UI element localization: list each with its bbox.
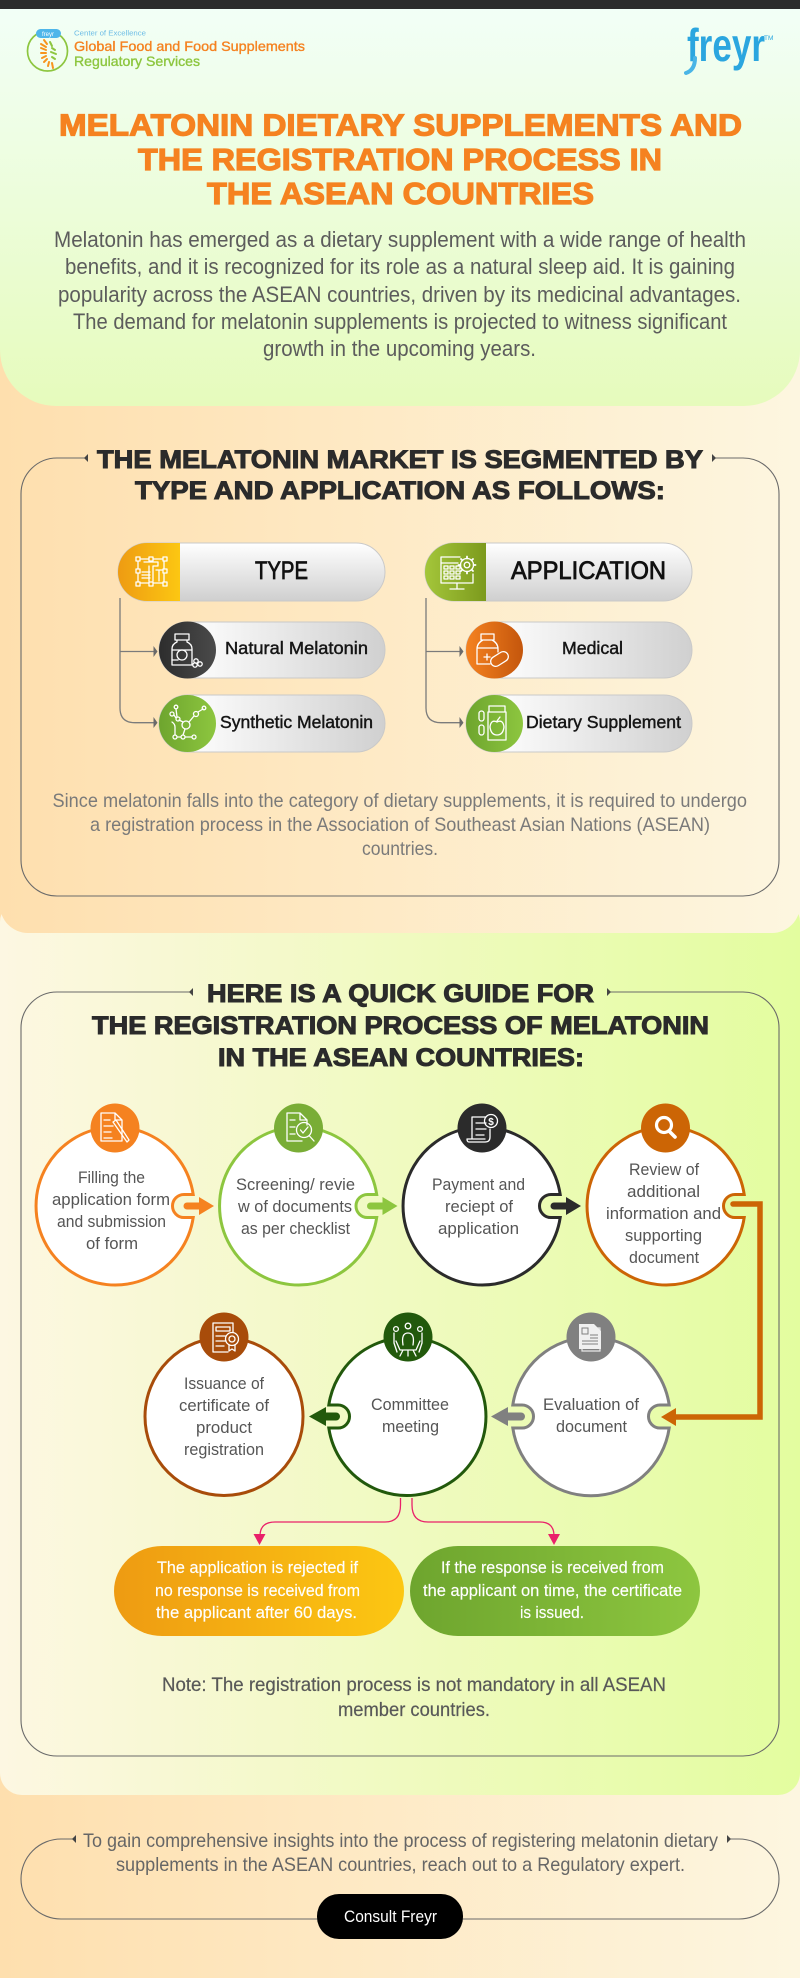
text: introduction: benefits, and it is recognized for its role as a natural sleep aid. It is gaining: [65, 254, 735, 279]
logo: centre of excellence: Center of Excellence: [74, 28, 146, 38]
text: step 4: Review of: [629, 1161, 699, 1179]
outcome: application rejected: The application is rejected if: [157, 1558, 358, 1577]
outcome: certificate issued: is issued.: [520, 1603, 584, 1622]
text: step 1: application form: [52, 1191, 170, 1209]
pill: medical: Medical: [562, 638, 623, 658]
note: Note: The registration process is not mandatory in all ASEAN: [162, 1674, 666, 1696]
heading: quick guide: IN THE ASEAN COUNTRIES:: [218, 1044, 584, 1072]
pill: natural melatonin: Natural Melatonin: [225, 638, 368, 658]
step 1: filling the application form: [36, 1104, 214, 1285]
step 5: issuance of certificate: [145, 1312, 303, 1496]
icon: people at table: [384, 1312, 432, 1362]
step 3: payment: [403, 1104, 581, 1285]
text: step 7: Evaluation of: [543, 1396, 639, 1414]
logo: centre of excellence: Global Food and Food Supplements: [74, 38, 305, 54]
icon: documents: [566, 1312, 616, 1362]
text: step 3: reciept of: [445, 1198, 513, 1216]
arrow: committee to issuance: [309, 1407, 340, 1426]
arrow: step 1 to 2: [184, 1197, 214, 1215]
step 7: evaluation of document: [491, 1312, 669, 1496]
text: step 3: application: [438, 1220, 519, 1238]
pill: application: [425, 543, 692, 601]
text: introduction: popularity across the ASEAN countries, driven by its medicinal advantages.: [58, 282, 741, 307]
connector: application tree: [426, 598, 464, 728]
outcome: certificate issued: If the response is received from: [441, 1558, 664, 1577]
text: introduction: Melatonin has emerged as a dietary supplement with a wide range of health: [54, 227, 746, 252]
outcome: application rejected: no response is received from: [155, 1581, 360, 1600]
logo: freyr: TM: [764, 35, 773, 42]
outline frame: market segmentation: [21, 458, 779, 896]
button: consult freyr: [317, 1894, 463, 1939]
pill: type: [118, 543, 385, 601]
text: introduction: growth in the upcoming years.: [263, 336, 536, 361]
heading: quick guide: HERE IS A QUICK GUIDE FOR: [207, 980, 594, 1008]
arrow: step 7 to committee: [491, 1407, 525, 1426]
text: step 6: meeting: [382, 1418, 439, 1436]
text: step 2: [236, 1176, 355, 1238]
icon: certificate: [200, 1312, 248, 1362]
text: step 1: of form: [86, 1235, 138, 1253]
text: step 4: additional: [627, 1183, 700, 1201]
logo: centre of excellence: Regulatory Services: [74, 53, 200, 69]
icon: receipt and dollar: $: [488, 1117, 494, 1128]
text: registration requirement: Since melatonin falls into the category of dietary supplements, it is required to undergo: [52, 790, 747, 812]
text: registration requirement: a registration process in the Association of Southeast Asian Nations (ASEAN): [90, 814, 710, 836]
text: step 5: registration: [184, 1441, 264, 1459]
icon: form and pencil: [90, 1104, 140, 1152]
pill: dietary supplement: [466, 695, 692, 752]
text: step 6: [371, 1396, 449, 1436]
panel: call to action: [21, 1830, 779, 1939]
step 6: committee meeting: [309, 1312, 486, 1496]
icon: monitor with gear: [441, 556, 476, 589]
title: [59, 108, 742, 211]
title: MELATONIN DIETARY SUPPLEMENTS AND: [59, 108, 742, 142]
pill: type: TYPE: [255, 557, 308, 585]
icon: molecule: [170, 705, 206, 739]
title: THE ASEAN COUNTRIES: [207, 176, 594, 211]
text: introduction: The demand for melatonin supplements is projected to witness significant: [73, 309, 727, 334]
button: consult freyr: Consult Freyr: [344, 1907, 437, 1926]
step 4: review of additional information: [587, 1104, 744, 1285]
outcome: certificate issued: [410, 1546, 700, 1636]
note: member countries.: [338, 1699, 490, 1721]
note: [162, 1674, 666, 1721]
title: THE REGISTRATION PROCESS IN: [138, 142, 662, 177]
pill: medical: [466, 622, 692, 678]
heading: quick guide: [92, 980, 709, 1072]
arrow: committee to certificate outcome: [412, 1498, 560, 1545]
frame end markers: [189, 988, 611, 996]
text: step 3: Payment and: [432, 1176, 525, 1194]
text: step 7: document: [556, 1418, 627, 1436]
top bar: [0, 0, 800, 9]
text: call to action: To gain comprehensive insights into the process of registering melatonin dietary: [83, 1830, 718, 1852]
text: step 4: supporting: [625, 1227, 702, 1245]
logo: centre of excellence: freyr: [42, 32, 54, 38]
frame end markers: [84, 454, 716, 462]
icon: medicine bottle and capsule: [477, 634, 510, 668]
connector: type tree: [120, 598, 158, 728]
outline frame: registration process: [21, 992, 779, 1756]
icon: supplement jar with apple: [479, 706, 506, 740]
outcome: certificate issued: the applicant on time, the certificate: [423, 1581, 682, 1600]
outcome: application rejected: [114, 1546, 404, 1636]
text: step 5: product: [196, 1419, 252, 1437]
logo: centre of excellence: [28, 28, 305, 71]
text: step 1: [52, 1169, 170, 1253]
icon: checklist and magnifier: [274, 1104, 323, 1152]
icon: melatonin bottle: [172, 634, 202, 667]
text: call to action: supplements in the ASEAN countries, reach out to a Regulatory expert.: [116, 1854, 685, 1876]
text: call to action: [83, 1830, 718, 1876]
frame end markers: [72, 1835, 731, 1843]
icon: magnifier: [641, 1104, 690, 1152]
text: registration requirement: countries.: [362, 838, 438, 860]
text: step 4: [606, 1161, 721, 1267]
heading: market segmentation: TYPE AND APPLICATION AS FOLLOWS:: [135, 477, 665, 505]
heading: quick guide: THE REGISTRATION PROCESS OF MELATONIN: [92, 1012, 709, 1040]
text: step 5: [179, 1375, 269, 1459]
pill: application: APPLICATION: [511, 557, 666, 585]
text: step 2: Screening/ revie: [236, 1176, 355, 1194]
text: step 4: document: [629, 1249, 699, 1267]
arrow: committee to rejected outcome: [254, 1498, 400, 1545]
text: step 1: and submission: [57, 1213, 166, 1231]
pill: natural melatonin: [159, 622, 385, 678]
text: introduction: [54, 227, 746, 361]
text: step 2: w of documents: [237, 1198, 352, 1216]
text: step 3: [432, 1176, 525, 1238]
pill: synthetic melatonin: Synthetic Melatonin: [220, 712, 373, 732]
panel: registration process: [0, 900, 800, 1795]
arrow: step 2 to 3: [367, 1197, 398, 1215]
icon: type selection box: [136, 557, 167, 586]
heading: market segmentation: THE MELATONIN MARKET IS SEGMENTED BY: [97, 446, 703, 474]
heading: market segmentation: [97, 446, 703, 505]
text: step 2: as per checklist: [241, 1220, 350, 1238]
pill: synthetic melatonin: [159, 695, 385, 752]
text: step 5: certificate of: [179, 1397, 269, 1415]
outcome: application rejected: the applicant after 60 days.: [156, 1603, 357, 1622]
text: step 7: [543, 1396, 639, 1436]
pill: dietary supplement: Dietary Supplement: [526, 712, 681, 732]
panel: market segmentation: [0, 395, 800, 933]
text: step 5: Issuance of: [184, 1375, 264, 1393]
panel: header and introduction: [0, 9, 800, 406]
logo: freyr: freyr: [687, 19, 765, 71]
outline frame: call to action: [21, 1839, 779, 1919]
arrow: step 3 to 4: [550, 1197, 581, 1215]
icon: receipt and dollar: [458, 1104, 506, 1152]
text: step 1: Filling the: [78, 1169, 145, 1187]
step 2: screening: [220, 1104, 398, 1285]
text: step 6: Committee: [371, 1396, 449, 1414]
text: registration requirement: [52, 790, 747, 860]
arrow: step 4 to evaluation: [661, 1204, 760, 1426]
text: step 4: information and: [606, 1205, 721, 1223]
